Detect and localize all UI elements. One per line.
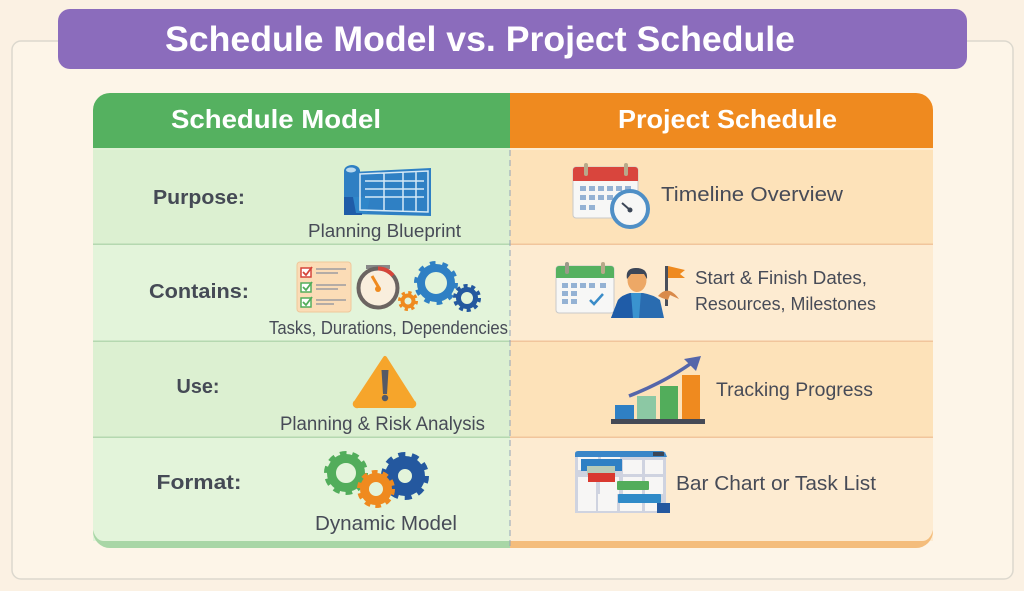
icon: large blue gear (416, 264, 456, 302)
panel: schedule model column (93, 93, 510, 548)
text: start and finish dates, resources, milestones (695, 268, 876, 314)
heading: project schedule: Project Schedule (618, 104, 837, 134)
icon: checklist (297, 262, 351, 312)
text: start and finish dates, resources, milestones: Start & Finish Dates, (695, 268, 867, 288)
text: tracking progress: Tracking Progress (716, 380, 873, 401)
icon: calendar with check (556, 262, 614, 313)
row label: contains: Contains: (149, 281, 249, 303)
text: timeline overview: Timeline Overview (661, 184, 844, 206)
icon: small orange gear (400, 292, 416, 310)
icon: calendar with clock (573, 163, 648, 227)
icon: businessman with flag (611, 266, 685, 318)
text: start and finish dates, resources, milestones: Resources, Milestones (695, 294, 876, 314)
row label: format: Format: (156, 472, 242, 494)
title banner: Schedule Model vs. Project Schedule (165, 20, 795, 59)
icon: rising bar chart (611, 356, 705, 424)
text: bar chart or task list: Bar Chart or Task List (676, 473, 876, 495)
text: dynamic model: Dynamic Model (315, 513, 457, 535)
title banner (58, 9, 967, 69)
icon: three gears (326, 454, 426, 506)
row label: use: Use: (176, 376, 220, 398)
panel: project schedule column (510, 93, 933, 548)
comparison table (93, 93, 933, 548)
heading: schedule model: Schedule Model (171, 104, 381, 134)
text: planning and risk analysis: Planning & Risk Analysis (280, 414, 485, 435)
icon: small blue gear (455, 286, 479, 310)
icon: blueprint (344, 165, 431, 216)
icon: warning triangle (355, 358, 414, 406)
icon: stopwatch (358, 265, 398, 308)
text: tasks, durations, dependencies: Tasks, Durations, Dependencies (269, 318, 508, 338)
row label: purpose: Purpose: (153, 187, 245, 209)
icon: gantt chart window (575, 451, 670, 513)
text: planning blueprint: Planning Blueprint (308, 221, 461, 241)
